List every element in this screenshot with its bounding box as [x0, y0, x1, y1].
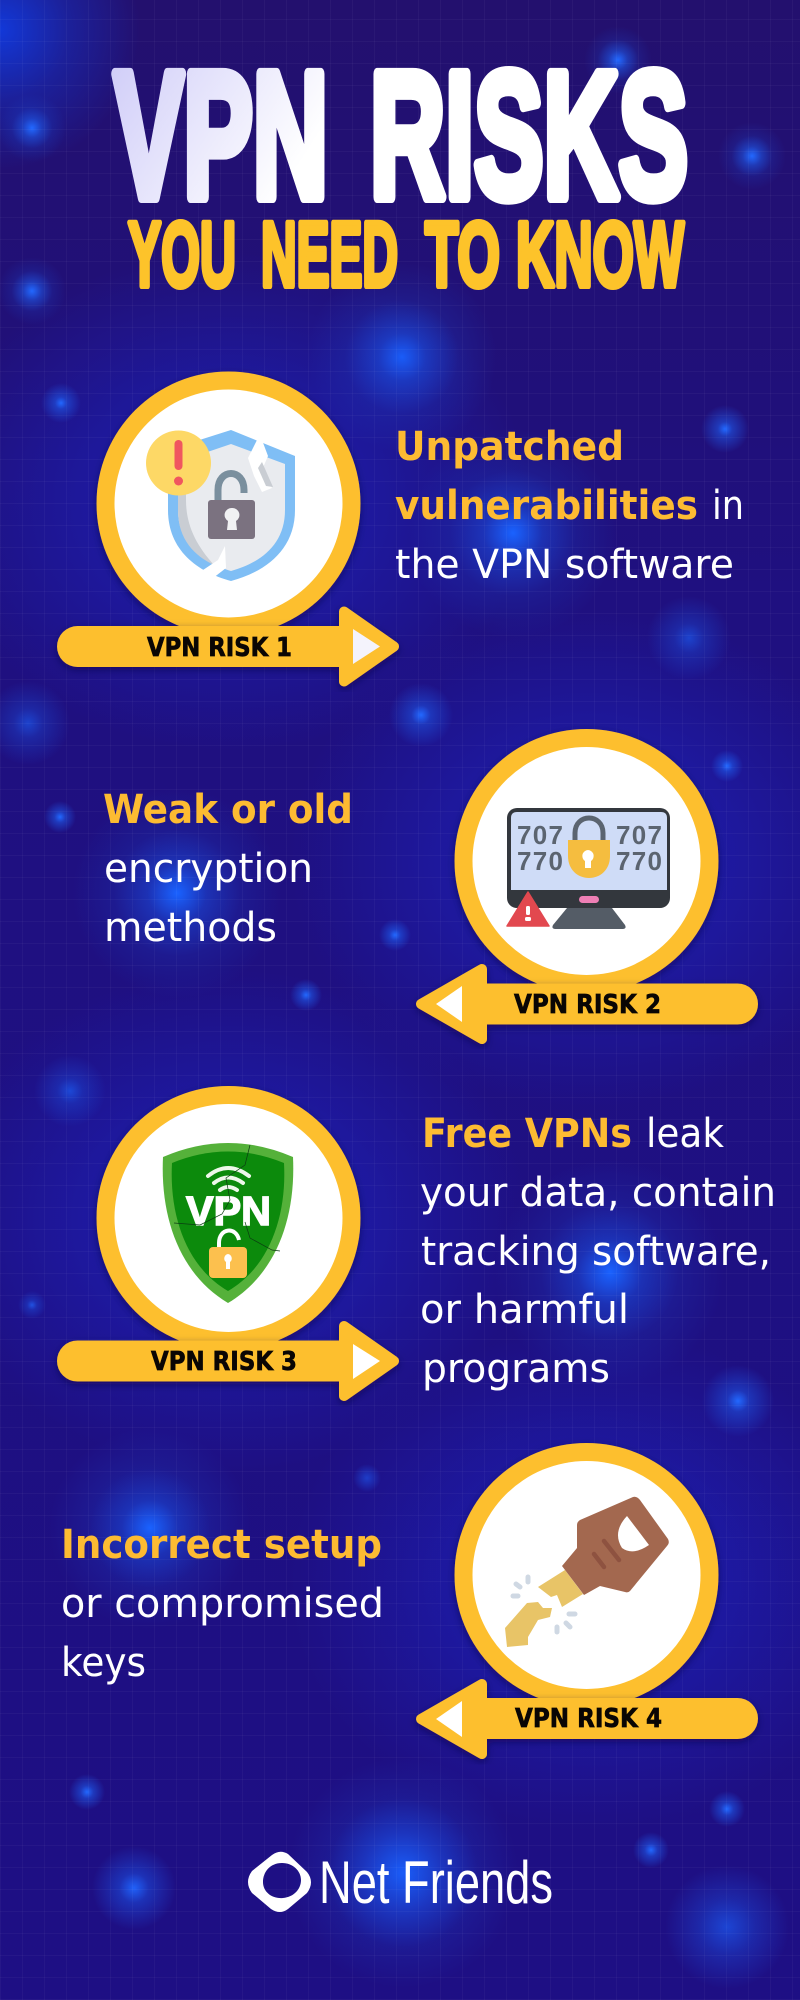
- title: [114, 35, 688, 306]
- heading: YOU NEED TO KNOW: TO: [425, 204, 500, 306]
- text block: risk 2: Weak or old: [103, 787, 353, 833]
- icon part: keyhole: [225, 508, 239, 530]
- logo wordmark: Net Friends: [319, 1849, 553, 1916]
- panel: VPN risk 2 badge: [421, 729, 758, 1039]
- icon part: monitor frame: [507, 808, 670, 908]
- text block: risk 3: leak: [646, 1111, 725, 1157]
- icon part: stand: [552, 908, 626, 929]
- text block: risk 2: methods: [104, 905, 277, 951]
- icon part: sparks: [513, 1577, 575, 1632]
- icon part: warning triangle: [507, 892, 549, 926]
- icon part: padlock: [575, 818, 603, 842]
- panel: VPN risk 4 badge: [421, 1443, 758, 1754]
- text block: risk 3: programs: [422, 1346, 610, 1392]
- text block: risk 1: vulnerabilities: [395, 483, 698, 529]
- text block: risk 3: or harmful: [420, 1287, 629, 1333]
- logo: Net Friends: [248, 1849, 553, 1916]
- icon part: key blade: [538, 1570, 583, 1607]
- heading: YOU NEED TO KNOW: [128, 204, 684, 306]
- icon part: padlock body: [208, 500, 255, 539]
- panel: VPN risk 3 badge: [57, 1086, 394, 1396]
- icon part: binary digits: [517, 820, 662, 876]
- text block: risk 3: tracking software,: [421, 1229, 771, 1275]
- badge circle 1: [96, 372, 360, 636]
- icon part: screen: [511, 812, 667, 890]
- text block: risk 4: or compromised: [61, 1581, 384, 1627]
- ribbon arrow 1: [57, 612, 394, 682]
- icon: broken shield with open lock: [146, 430, 295, 582]
- text block: risk 3: your data, contain: [420, 1170, 776, 1216]
- heading: VPN RISKS: VPN: [114, 35, 328, 235]
- heading: VPN RISKS: [114, 35, 688, 235]
- label: VPN RISK 3: VPN RISK 3: [151, 1347, 297, 1377]
- text block: risk 1: Unpatched: [395, 424, 624, 470]
- icon part: VPN wording: VPN: [186, 1188, 271, 1234]
- badge circle 4: [454, 1443, 718, 1707]
- icon part: key head: [562, 1497, 669, 1595]
- icon part: open shackle: [218, 474, 244, 500]
- label: VPN RISK 1: VPN RISK 1: [147, 633, 292, 663]
- ribbon arrow 2: [421, 969, 758, 1039]
- icon part: binary digits: 707: [517, 820, 563, 850]
- icon part: grip stripes: [594, 1541, 619, 1567]
- icon part: wifi arcs: [208, 1168, 249, 1190]
- panel: VPN risk 1 badge: [57, 372, 394, 682]
- icon part: binary digits: 770: [517, 846, 563, 876]
- icon part: key hole: [618, 1516, 649, 1551]
- label: VPN RISK 4: VPN RISK 4: [515, 1704, 662, 1734]
- text block: risk 4: [61, 1522, 384, 1686]
- ribbon arrow 4: [421, 1684, 758, 1754]
- icon part: binary digits: 770: [616, 846, 662, 876]
- icon part: cracks: [174, 1145, 280, 1251]
- text block: risk 1: the VPN software: [395, 542, 734, 588]
- text block: risk 4: keys: [61, 1640, 146, 1686]
- heading: YOU NEED TO KNOW: NEED: [261, 204, 398, 306]
- text block: risk 2: encryption: [104, 846, 313, 892]
- heading: YOU NEED TO KNOW: YOU: [128, 204, 236, 306]
- text block: risk 4: Incorrect setup: [61, 1522, 382, 1568]
- badge circle 2: [454, 729, 718, 993]
- text block: risk 1: in: [712, 483, 744, 529]
- ribbon arrow 3: [57, 1326, 394, 1396]
- icon part: broken tip: [505, 1602, 552, 1647]
- icon part: alert badge: [146, 430, 211, 496]
- logo mark: [248, 1852, 311, 1912]
- text block: risk 2: [103, 787, 353, 951]
- icon: green VPN shield: [163, 1143, 293, 1303]
- badge circle 3: [96, 1086, 360, 1350]
- text block: risk 3: [420, 1111, 776, 1392]
- text block: risk 1: [395, 424, 744, 588]
- label: VPN RISK 2: VPN RISK 2: [514, 990, 661, 1020]
- text block: risk 3: Free VPNs: [422, 1111, 632, 1157]
- icon part: binary digits: 707: [616, 820, 662, 850]
- heading: YOU NEED TO KNOW: KNOW: [516, 204, 684, 306]
- icon: broken key: [505, 1497, 669, 1647]
- icon part: open padlock: [219, 1231, 239, 1248]
- icon: monitor with padlock: [507, 808, 670, 929]
